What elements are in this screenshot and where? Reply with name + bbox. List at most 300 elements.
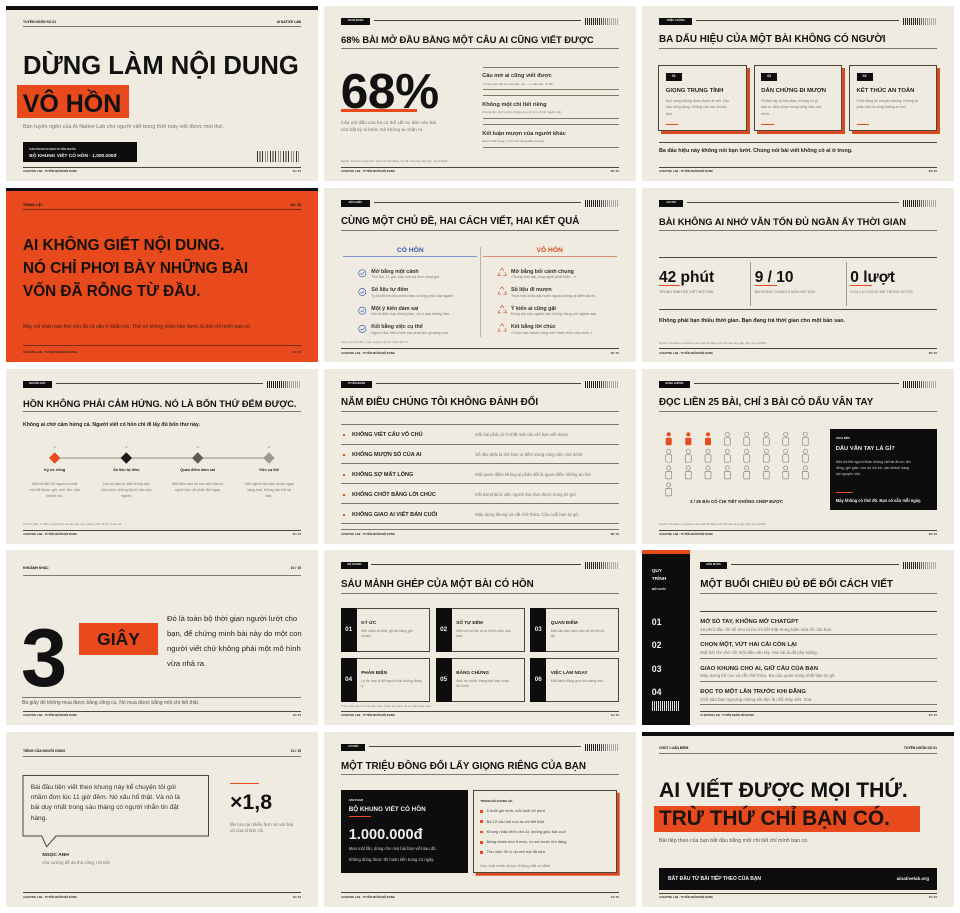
principle 2: Số liệu phải là thứ bạn tự đếm trong công việc của mình. <box>475 452 584 457</box>
card text: nào cũng đúng. Không câu nào là của <box>666 105 726 109</box>
quote <box>31 784 180 822</box>
box body: riêng, giờ giấc, con số nội bộ, câu khách hàng <box>836 466 909 470</box>
header label: CHỐT LUẬN ĐIỂM <box>659 746 688 750</box>
step 1: khách nói. <box>46 494 63 498</box>
side barcode <box>652 701 680 711</box>
pictogram caption: 3 / 25 BÀI CÓ CHI TIẾT KHÔNG CHÉP ĐƯỢC <box>690 499 783 504</box>
piece 1: KÝ ỨC <box>361 620 376 625</box>
step 2: Một bài chỉ chở nổi một dấu vân tay. Hai cái là đã pha loãng. <box>700 650 818 655</box>
slide title: CÙNG MỘT CHỦ ĐỀ, HAI CÁCH VIẾT, HAI KẾT QUẢ <box>341 216 579 227</box>
piece 4 <box>341 658 430 702</box>
box body: Một chi tiết người khác không viết lại được: tên <box>836 460 911 464</box>
big number: 68% <box>341 64 439 119</box>
source note: Nguồn: AI Native Lab kiểm toán 214 bài đăng của 36 nhà sáng lập Việt, quý 2/2026. <box>659 341 766 345</box>
principle 5 <box>343 511 579 518</box>
included list: Bảng chấm hồn 5 mức, tự soi trước khi đăng <box>487 839 566 844</box>
footer left: AI NATIVE LAB · TUYÊN NGÔN NỘI DUNG <box>341 170 395 173</box>
closing title: AI VIẾT ĐƯỢC MỌI THỨ. <box>659 779 908 802</box>
accent <box>856 124 869 125</box>
piece 2: bạn. <box>456 634 463 638</box>
header page: 10 / 15 <box>291 566 301 570</box>
step 4 <box>700 688 813 702</box>
footer left: AI NATIVE LAB · TUYÊN NGÔN NỘI DUNG <box>659 896 713 899</box>
included note: Học một mình được. Không bắt cố định. <box>480 863 551 868</box>
left column items: Mở bằng một cảnh <box>371 269 419 275</box>
piece 2: 02 <box>440 626 447 633</box>
definition box <box>830 429 937 510</box>
principle 2: KHÔNG MƯỢN SỐ CỦA AI <box>352 452 421 458</box>
product box <box>23 142 137 162</box>
step 1: 15 phút đầu chỉ để moi ra ba chi tiết thật trong tuần vừa rồi của bạn. <box>700 627 832 632</box>
footer page number: 14 / 15 <box>611 896 619 899</box>
footer left: AI NATIVE LAB · TUYÊN NGÔN NỘI DUNG <box>341 896 395 899</box>
panel: slide 14 offer <box>324 732 636 907</box>
piece 1: 01 <box>345 626 352 633</box>
footer left: AI NATIVE LAB · TUYÊN NGÔN NỘI DUNG <box>23 896 77 899</box>
header label: TRANG LẶT <box>23 202 43 206</box>
panel: slide 3 symptoms <box>642 6 954 181</box>
item 2 detail: Không tên, không giờ, không con số của chính người viết. <box>482 110 562 114</box>
right column items: Kết bằng lời chúc <box>511 324 556 330</box>
card 2 <box>754 65 842 131</box>
section tag <box>659 381 690 388</box>
section tag: CHẨN ĐOÁN <box>348 19 363 22</box>
step 2: Con số bạn tự đếm trong việc <box>103 482 150 486</box>
footer page number: 15 / 15 <box>929 896 937 899</box>
header label: TUYÊN NGÔN SỐ 01 <box>23 20 56 24</box>
statement: AI KHÔNG GIẾT NỘI DUNG. <box>23 237 224 254</box>
footer left: AI NATIVE LAB · TUYÊN NGÔN NỘI DUNG <box>700 714 754 717</box>
big number explanation: của bất kỳ ai khác mà không ai nhận ra. <box>341 126 424 132</box>
stat 3 label: LƯU LẠI CỦA 81 BÀI TRONG SỐ ĐÓ <box>850 290 913 294</box>
piece 3 <box>530 608 619 652</box>
slide title: MỘT TRIỆU ĐỒNG ĐỔI LẤY GIỌNG RIÊNG CỦA BẠN <box>341 761 586 772</box>
subtitle: Bản tuyên ngôn của AI Native Lab cho người viết trong thời máy viết được mọi thứ. <box>23 124 224 130</box>
piece 1: và tên. <box>361 634 372 638</box>
side heading <box>652 569 666 582</box>
closing sentence: Bài tiếp theo của bạn bắt đầu bằng một chi tiết chỉ mình bạn có. <box>659 838 809 844</box>
card text <box>856 98 918 109</box>
section tag: BỘ KHUNG <box>347 563 362 566</box>
note: Thiếu một mảnh thì bài vẫn chạy. Thiếu ba mảnh thì nó thành bạn sao. <box>341 704 431 708</box>
step 2: của mình, không lấy từ báo cáo <box>101 488 151 492</box>
orange underline <box>341 109 417 112</box>
box takeaway: Máy không có thứ đó. Bạn có sẵn mỗi ngày. <box>836 498 921 503</box>
piece 5: lại được. <box>456 684 470 688</box>
step number 1: 01 <box>652 617 661 627</box>
section tag: TRIỆU CHỨNG <box>666 19 685 22</box>
right column items: Trích một khảo sát nước ngoài không ai kiểm được. <box>511 294 596 298</box>
step 4: bạn. <box>266 494 272 498</box>
piece 4: 04 <box>345 676 352 683</box>
badge 03: 03 <box>862 74 866 78</box>
step 2 <box>101 446 152 498</box>
slide title: NĂM ĐIỀU CHÚNG TÔI KHÔNG ĐÁNH ĐỔI <box>341 397 538 408</box>
footer left: AI NATIVE LAB · TUYÊN NGÔN NỘI DUNG <box>341 714 395 717</box>
barcode <box>267 380 301 388</box>
supporting sentence: Máy chỉ nhân bản thứ vốn đã có sẵn ở khắp nơi. Thứ nó không nhân bản được là thứ chỉ mình bạn có. <box>23 324 251 330</box>
piece 4: ý. <box>361 684 364 688</box>
piece 2 <box>436 608 525 652</box>
footer left: AI NATIVE LAB · TUYÊN NGÔN NỘI DUNG <box>341 533 395 536</box>
item 1 detail: «Trong thời đại số hóa hiện nay…» xuất hiện 41 lần. <box>482 82 554 86</box>
principle 5: KHÔNG GIAO AI VIẾT BẢN CUỐI <box>352 512 437 518</box>
slide title: HỒN KHÔNG PHẢI CẢM HỨNG. NÓ LÀ BỐN THỨ ĐẾM ĐƯỢC. <box>23 399 296 409</box>
card title: KẾT THÚC AN TOÀN <box>856 88 914 94</box>
step 2: CHỌN MỘT, VỨT HAI CÁI CÒN LẠI <box>700 642 797 648</box>
right column items: «Trong thời đại công nghệ phát triển…» <box>511 275 576 279</box>
step 4: Việc cụ thể <box>259 468 279 472</box>
icons: check circles <box>358 269 366 333</box>
slide title: BA DẤU HIỆU CỦA MỘT BÀI KHÔNG CÓ NGƯỜI <box>659 34 886 45</box>
step 2: ngành. <box>121 494 132 498</box>
step 4 <box>244 446 294 498</box>
big number explanation <box>340 120 436 132</box>
principle 1 <box>343 431 569 438</box>
side panel <box>642 550 690 725</box>
piece 6: Một hành động gọn cho sáng mai. <box>551 679 604 683</box>
card text: Chốt bằng lời khuyên chung. Không ai <box>856 99 918 103</box>
step 1: 01 <box>53 447 56 449</box>
section tag <box>659 18 692 24</box>
section tag: ĐỐI CHIẾU <box>349 201 362 204</box>
panel: slide 1 cover <box>6 6 318 181</box>
footer page number: 06 / 15 <box>929 352 937 355</box>
left column items: Số liệu tự đếm <box>371 287 408 293</box>
note: Cùng một chủ đề, vì sao xuống một nơi nhận định rõ. <box>341 340 409 344</box>
box body: nói nguyên văn. <box>836 472 861 476</box>
barcode <box>585 562 619 569</box>
stat 3: 0 lượt <box>850 269 895 286</box>
source note: Nguồn: AI Native Lab kiểm toán 214 bài đăng của 36 nhà sáng lập Việt, quý 2/2026. <box>341 159 448 163</box>
step 3: Máy dựng bố cục và cắt chữ thừa. Ba câu quan trọng nhất bạn tự gõ. <box>700 673 836 678</box>
step 4: sáng mai, không cần hỏi lại <box>247 488 291 492</box>
step 2 <box>700 641 818 655</box>
barcode <box>903 562 937 569</box>
section tag: LỜI MỜI <box>348 745 358 748</box>
piece 6 <box>530 658 619 702</box>
side heading: QUY <box>652 569 662 574</box>
section tag: TUYÊN NGÔN <box>348 382 365 385</box>
speech bubble <box>22 775 209 848</box>
footer left: AI NATIVE LAB · TUYÊN NGÔN NỘI DUNG <box>23 170 77 173</box>
big number: 3 <box>21 611 67 704</box>
quote: nhầm đơn lúc 11 giờ đêm. Nó xấu hổ thật. Và nó là <box>31 794 180 801</box>
note: Có bốn điều, từ điền trong bước sau đó việc bạn, không cần để tìm ở đâu xa. <box>23 522 122 526</box>
principle 2 <box>343 451 584 458</box>
lead: Không ai chờ cảm hứng cả. Người viết có hồn chỉ đi lấy đủ bốn thứ này. <box>23 422 200 428</box>
box title: DẤU VÂN TAY LÀ GÌ? <box>836 446 895 452</box>
action text: BẮT ĐẦU TỪ BÀI TIẾP THEO CỦA BẠN <box>668 876 761 882</box>
piece 4: Lý do hợp lý để người đọc không đồng <box>361 679 421 683</box>
principle 1: Mỗi bài phải có ít nhất một câu chỉ bạn viết được. <box>475 432 569 437</box>
section tag <box>341 18 370 24</box>
step 1: Một chi tiết chỉ người có mặt <box>32 482 77 486</box>
card text: Đọc xong không đoán được ai viết. Câu <box>666 99 729 103</box>
top black bar <box>6 188 318 191</box>
step 3: 03 <box>196 447 199 449</box>
included list: Khung nhắc lệnh cho AI, không giao bài cuối <box>487 829 566 834</box>
piece 6: VIỆC LÀM NGAY <box>551 670 588 674</box>
step 1: mới kể được: giờ, mùi, tên, câu <box>30 488 80 492</box>
orange label: GIÂY <box>97 629 140 649</box>
header label: KHOẢNH KHẮC <box>23 566 49 570</box>
footer page number: 03 / 15 <box>929 170 937 173</box>
panel: slide 9 evidence <box>642 369 954 544</box>
panel: slide 8 five principles <box>324 369 636 544</box>
statement: NÓ CHỈ PHƠI BÀY NHỮNG BÀI <box>23 260 248 277</box>
footer page number: 07 / 15 <box>293 533 301 536</box>
barcode <box>903 18 937 25</box>
included card <box>473 790 617 873</box>
slide title: SÁU MẢNH GHÉP CỦA MỘT BÀI CÓ HỒN <box>341 579 534 590</box>
step 1 <box>700 618 832 632</box>
accent <box>761 124 774 125</box>
footer page number: 04 / 15 <box>293 350 301 354</box>
footer left: AI NATIVE LAB · TUYÊN NGÔN NỘI DUNG <box>659 170 713 173</box>
step 3 <box>700 665 836 678</box>
left column items: Một ý kiến dám sai <box>371 306 418 312</box>
panel: slide 4 orange statement <box>6 188 318 362</box>
principle 3: Một quan điểm không ai phản đối là quan điểm không ai nhớ. <box>475 472 592 477</box>
left column items: Tỷ lệ đổi trả của chính bạn, không phải của ngành. <box>371 294 454 298</box>
barcode <box>257 151 299 162</box>
included list: Bộ 12 câu hỏi moi ra chi tiết thật <box>487 819 544 824</box>
footer page number: 02 / 15 <box>611 170 619 173</box>
section tag <box>341 744 365 750</box>
right column items: Đúng với mọi ngành nên không đúng với ngành nào. <box>511 312 597 316</box>
barcode <box>585 380 619 388</box>
quote: hàng. <box>31 815 47 822</box>
card text <box>761 99 822 116</box>
symptom list <box>482 67 619 148</box>
top black bar <box>642 732 954 736</box>
pictogram: 25 articles, 3 highlighted <box>665 432 809 496</box>
step number 2: 02 <box>652 640 661 650</box>
stat 2: 9 / 10 <box>755 269 793 286</box>
step number 4: 04 <box>652 687 661 697</box>
stat 1 label: TRUNG BÌNH ĐỂ VIẾT MỘT BÀI <box>659 290 713 294</box>
box body <box>836 460 911 476</box>
explanation: người viết chứ không phải một mô hình <box>167 644 301 653</box>
panel: slide 10 three seconds <box>6 550 318 725</box>
piece 3: lại. <box>551 634 555 638</box>
multiplier note <box>230 822 293 833</box>
piece 2: Một con số lấy ra từ chính việc của <box>456 629 510 633</box>
piece 1: Một cảnh có thật, ghi lại bằng giờ <box>361 629 413 633</box>
panel: slide 12 process <box>642 550 954 725</box>
included list: Thư viện 30 ví dụ mở bài đã sửa <box>487 849 545 854</box>
slide title: BÀI KHÔNG AI NHỚ VẪN TỐN ĐỦ NGẦN ẤY THỜI GIAN <box>659 217 906 227</box>
barcode <box>585 18 619 25</box>
piece 3: Một câu bạn dám bảo vệ khi bị hỏi <box>551 629 604 633</box>
quote: bài duy nhất trong sáu tháng có người nhắn tin đặt <box>31 804 179 811</box>
piece 2: SỐ TỰ ĐẾM <box>456 620 483 625</box>
slide title: ĐỌC LIỀN 25 BÀI, CHỈ 3 BÀI CÓ DẤU VÂN TAY <box>659 397 873 408</box>
takeaway: Không phải bạn thiếu thời gian. Bạn đang trả thời gian cho một bản sao. <box>659 318 845 324</box>
explanation: Đó là toàn bộ thời gian người lướt cho <box>167 614 297 623</box>
right column items: Mở bằng bối cảnh chung <box>511 269 574 275</box>
item 3 detail: Đoạn chốt trùng ý với 5 bài đứng đầu Google. <box>482 139 545 143</box>
footer page number: 10 / 15 <box>293 714 301 717</box>
step number 3: 03 <box>652 664 661 674</box>
multiplier note: lần lưu lại nhiều hơn so với bài <box>230 822 293 827</box>
footer page number: 13 / 15 <box>293 896 301 899</box>
included list <box>480 808 566 854</box>
principle 3: KHÔNG SỢ MẤT LÒNG <box>352 472 413 478</box>
step 4: Việc người đọc làm được ngay <box>244 482 294 486</box>
statement <box>23 236 248 300</box>
panel: slide 15 closing <box>642 732 954 907</box>
footer left: AI NATIVE LAB · TUYÊN NGÔN NỘI DUNG <box>23 533 77 536</box>
multiplier: ×1,8 <box>230 790 272 814</box>
website: ainativelab.org <box>897 876 929 881</box>
product name: BỘ KHUNG VIẾT CÓ HỒN <box>349 806 426 813</box>
card text: phản đối và cũng không ai nhớ. <box>856 105 907 109</box>
badge 01 <box>666 73 682 81</box>
price label: SẢN PHẨM <box>349 799 363 802</box>
quote: Bài đầu tiên viết theo khung này kể chuyện tôi gói <box>31 784 176 790</box>
footer page number: 01 / 15 <box>293 170 301 173</box>
column head: with soul: CÓ HỒN <box>397 247 424 254</box>
right column items: Số liệu đi mượn <box>511 287 552 293</box>
slide title: 68% BÀI MỞ ĐẦU BẰNG MỘT CÂU AI CŨNG VIẾT ĐƯỢC <box>341 34 594 45</box>
header label: TIẾNG CỦA NGƯỜI DÙNG <box>23 749 65 753</box>
barcode <box>903 200 937 207</box>
card text: bạn. <box>666 112 673 116</box>
footer page number: 11 / 15 <box>611 714 619 717</box>
accent <box>836 492 853 493</box>
header brand: AI NATIVE LAB <box>277 20 301 24</box>
panel: slide 7 origin <box>6 369 318 544</box>
card title: GIỌNG TRUNG TÍNH <box>666 88 723 94</box>
stat 2 label: BÀI DÙNG CHUNG 5 MẪU MỞ ĐẦU <box>755 290 815 294</box>
step 4: ĐỌC TO MỘT LẦN TRƯỚC KHI ĐĂNG <box>700 689 806 695</box>
author name: NGỌC ANH <box>42 853 69 858</box>
section tag <box>341 200 370 206</box>
badge 02 <box>761 73 777 81</box>
big number explanation: Câu mở đầu của họ có thể cắt ra, dán vào bài <box>341 120 436 124</box>
footer left: AI NATIVE LAB · TUYÊN NGÔN NỘI DUNG <box>341 352 395 355</box>
piece 1 <box>341 608 430 652</box>
section tag: NGUỒN GỐC <box>29 382 45 385</box>
card text: Số liệu lấy từ bài khác. Không có gì <box>761 99 818 103</box>
piece 5: 05 <box>440 676 447 683</box>
footer page number: 05 / 15 <box>611 352 619 355</box>
explanation: bạn, để chứng minh bài này do một con <box>167 629 302 638</box>
footer left: AI NATIVE LAB · TUYÊN NGÔN NỘI DUNG <box>23 714 77 717</box>
principle 4 <box>343 491 577 498</box>
item 3 title: Kết luận mượn của người khác <box>482 131 566 137</box>
panel: slide 5 comparison <box>324 188 636 362</box>
statement: VỐN ĐÃ RỖNG TỪ ĐẦU. <box>23 283 201 300</box>
left column items: Thứ Ba, 21 giờ, kho còn ba đơn chưa gói. <box>371 275 440 279</box>
price note 1: Mua một lần, dùng cho mọi bài bạn viết sau đó. <box>349 846 437 851</box>
side sub-label: MỘT BUỔI <box>652 587 666 591</box>
step 3 <box>172 446 223 492</box>
step 2: Số liệu tự đếm <box>113 468 139 472</box>
panel: slide 6 cost <box>642 188 954 362</box>
price box <box>341 790 468 873</box>
accent <box>230 783 259 784</box>
takeaway: Ba dấu hiệu này không nói bạn lười. Chúng nói bài viết không có ai ở trong. <box>659 148 852 154</box>
explanation <box>167 614 302 668</box>
principle 4: Kết bài phải là việc người đọc làm được trong 24 giờ. <box>475 492 577 497</box>
principle 4: KHÔNG CHỐT BẰNG LỜI CHÚC <box>352 492 436 498</box>
included list: 6 buổi ghi hình, mỗi buổi 40 phút <box>487 808 545 813</box>
step 3: người đọc sẽ phản đối ngay. <box>175 488 220 492</box>
highlighted closing title: TRỪ THỨ CHỈ BẠN CÓ. <box>659 807 890 830</box>
product label: SẢN PHẨM ĐI KÈM TUYÊN NGÔN <box>29 147 76 151</box>
right column items <box>511 268 597 335</box>
badge 01: 01 <box>672 74 676 78</box>
piece 4: PHẢN BIỆN <box>361 670 387 674</box>
footer page number: 08 / 15 <box>611 533 619 536</box>
piece 3: QUAN ĐIỂM <box>551 620 578 625</box>
item 2 title: Không một chi tiết riêng <box>482 102 547 108</box>
step 4: 04 <box>268 447 270 449</box>
section tag <box>700 562 727 568</box>
footer page number: 12 / 15 <box>929 714 937 717</box>
icons: recycle arrows <box>498 268 507 332</box>
section tag <box>23 381 52 388</box>
left column items: Kết bằng việc cụ thể <box>371 324 423 330</box>
column head: soulless: VÔ HỒN <box>536 247 563 254</box>
card 3 <box>849 65 937 131</box>
piece 6: 06 <box>535 676 542 683</box>
right column items: Ý kiến ai cũng gật <box>511 306 556 312</box>
step 2: 02 <box>125 447 128 449</box>
left column items: Nói rõ điều bạn không làm, và vì sao không làm. <box>371 312 450 316</box>
piece 3: 03 <box>535 626 542 633</box>
section tag <box>341 562 368 568</box>
footer page number: 09 / 15 <box>929 533 937 536</box>
side heading: TRÌNH <box>652 577 666 582</box>
step 3: GIAO KHUNG CHO AI, GIỮ CÂU CỦA BẠN <box>700 666 818 672</box>
main title: DỪNG LÀM NỘI DUNG <box>23 52 299 80</box>
price note 2: Không dùng được thì hoàn tiền trong 14 ngày. <box>349 857 434 862</box>
barcode <box>585 744 619 751</box>
panel: slide 13 testimonial <box>6 732 318 907</box>
piece 5: Ảnh, tin nhắn, bảng tính bạn chụp <box>456 679 509 683</box>
item 1 title: Câu mở ai cũng viết được <box>482 73 552 79</box>
author role: chủ xưởng đồ da thủ công, Hà Nội <box>42 860 110 865</box>
multiplier note: cũ của chính chị. <box>230 828 264 833</box>
right column items: «Chúc bạn thành công trên hành trình của mình.» <box>511 331 592 335</box>
explanation: vừa nhả ra. <box>167 659 206 668</box>
product name: BỘ KHUNG VIẾT CÓ HỒN · 1.000.000đ <box>29 154 116 159</box>
section tag <box>659 200 683 206</box>
header right: TUYÊN NGÔN SỐ 01 <box>904 746 937 750</box>
timeline <box>30 446 294 498</box>
card text <box>666 99 729 116</box>
barcode <box>903 380 937 388</box>
card 1 <box>658 65 747 131</box>
top black bar <box>6 6 318 10</box>
piece 5: BẰNG CHỨNG <box>456 670 489 674</box>
principle 1: KHÔNG VIẾT CÂU VÔ CHỦ <box>352 432 423 438</box>
principle 3 <box>343 471 592 478</box>
step 1: MỞ SỔ TAY, KHÔNG MỞ CHATGPT <box>700 619 799 625</box>
left column items <box>371 268 454 335</box>
footer left: AI NATIVE LAB · TUYÊN NGÔN NỘI DUNG <box>659 352 713 355</box>
panel: slide 11 six pieces <box>324 550 636 725</box>
box label: CÁCH ĐẾM <box>836 437 850 440</box>
section tag: BẰNG CHỨNG <box>665 382 684 385</box>
accent <box>666 124 678 125</box>
header page: 13 / 15 <box>291 749 301 753</box>
orange cap <box>642 550 690 554</box>
